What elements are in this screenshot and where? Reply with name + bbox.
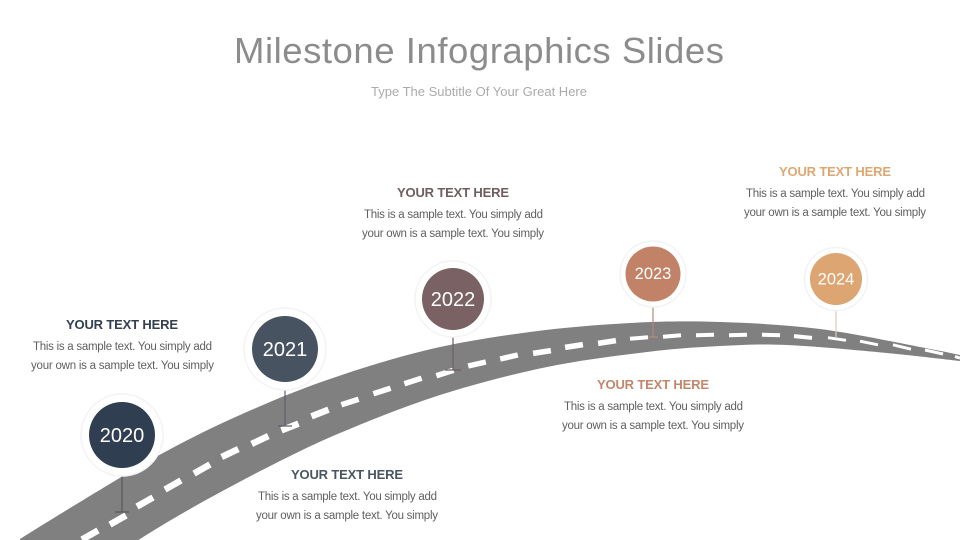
milestone 2022: 2022 [431, 289, 475, 311]
milestone 2022: This is a sample text. You simply add [364, 209, 543, 221]
title: Milestone Infographics Slides [234, 30, 724, 71]
milestone 2020 [31, 317, 214, 512]
milestone 2023 [562, 241, 744, 432]
milestone 2023: This is a sample text. You simply add [564, 401, 743, 413]
milestone 2024: your own is a sample text. You simply [744, 207, 926, 219]
milestone 2022: your own is a sample text. You simply [362, 228, 544, 240]
milestone 2021: your own is a sample text. You simply [256, 510, 438, 522]
text block 2022: YOUR TEXT HERE [397, 185, 509, 200]
milestone 2021: This is a sample text. You simply add [258, 491, 437, 503]
pin 2024 [835, 311, 837, 337]
pin 2020 [115, 476, 129, 512]
milestone 2022 [362, 185, 544, 370]
pin 2022 [445, 337, 461, 370]
badge 2024 [804, 248, 868, 310]
badge 2021 [244, 308, 326, 390]
pin 2023 [648, 307, 658, 337]
milestone 2023: 2023 [635, 265, 671, 283]
milestone 2023: your own is a sample text. You simply [562, 420, 744, 432]
milestone 2021 [244, 308, 438, 522]
text block 2020: YOUR TEXT HERE [66, 317, 178, 332]
subtitle: Type The Subtitle Of Your Great Here [371, 84, 587, 99]
text block 2023: YOUR TEXT HERE [597, 377, 709, 392]
badge 2022 [415, 261, 491, 337]
text block 2021: YOUR TEXT HERE [291, 467, 403, 482]
milestone 2020: This is a sample text. You simply add [33, 341, 212, 353]
milestone 2020: your own is a sample text. You simply [31, 360, 214, 372]
text block 2024: YOUR TEXT HERE [779, 164, 891, 179]
pin 2021 [278, 390, 292, 426]
milestone 2020: 2020 [100, 425, 144, 447]
milestone 2024: This is a sample text. You simply add [746, 188, 925, 200]
milestone 2024 [744, 164, 926, 337]
road [20, 321, 960, 540]
badge 2023 [620, 241, 686, 307]
badge 2020 [81, 394, 163, 476]
milestone 2021: 2021 [263, 339, 307, 361]
milestone 2024: 2024 [818, 270, 854, 288]
road centre dashes [82, 335, 960, 540]
